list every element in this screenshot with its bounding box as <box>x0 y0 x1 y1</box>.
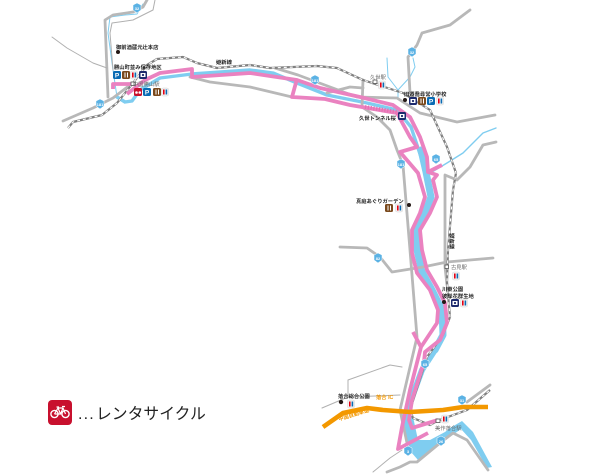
labels: 勝山町並み保存地区 <box>114 63 162 71</box>
legend: rental bicycle: レンタサイクル <box>96 405 206 423</box>
map: rivers <box>108 4 496 468</box>
route shields: 181 <box>97 102 104 107</box>
icons: facility markers: P <box>115 72 120 80</box>
stations <box>131 80 448 422</box>
route shields: 82 <box>376 256 381 261</box>
route shields: 3 <box>407 449 410 454</box>
icons: facility markers: P <box>145 90 150 96</box>
spot dots <box>116 50 446 404</box>
route shields: 65 <box>423 362 428 367</box>
route shields: 26 <box>439 439 444 444</box>
icons: facility markers: P <box>429 98 434 106</box>
legend: rental bicycle <box>48 400 206 425</box>
labels: 真庭あぐりガーデン <box>356 197 404 205</box>
labels: 落合 IC <box>376 393 394 401</box>
labels: 姫新線 <box>216 58 233 66</box>
icons: facility markers <box>113 71 468 423</box>
route shields: 32 <box>135 6 140 11</box>
route shields: 32 <box>410 50 415 55</box>
labels: 古見駅 <box>451 263 468 271</box>
labels: 御前酒蔵元辻本店 <box>116 43 159 51</box>
labels: 旧遷喬尋常小学校 <box>404 90 447 98</box>
route shields <box>96 3 466 456</box>
labels: 姫新線 <box>448 232 455 250</box>
expressway <box>323 407 488 427</box>
legend: rental bicycle: ... <box>78 406 95 423</box>
labels: 久世トンネル桜 <box>359 114 397 122</box>
labels: 中国勝山駅 <box>133 80 160 88</box>
route shields: 181 <box>398 162 405 167</box>
route shields: 31 <box>460 398 465 403</box>
map: railway lines <box>68 57 490 425</box>
route shields: 181 <box>312 78 319 83</box>
map: cycling route <box>113 69 447 449</box>
cherry blossom stretch <box>365 107 403 122</box>
labels: 中国自動車道 <box>337 406 371 423</box>
labels: 久世駅 <box>370 73 387 81</box>
labels: 美作落合駅 <box>435 424 462 432</box>
route shields: 65 <box>434 157 439 162</box>
icon: bicycle <box>48 400 72 425</box>
map: roads <box>52 0 496 472</box>
labels <box>114 43 474 432</box>
labels: 落合総合公園 <box>338 392 370 400</box>
labels: 彼岸花群生地 <box>442 292 474 300</box>
labels: 川東公園 <box>442 285 463 293</box>
